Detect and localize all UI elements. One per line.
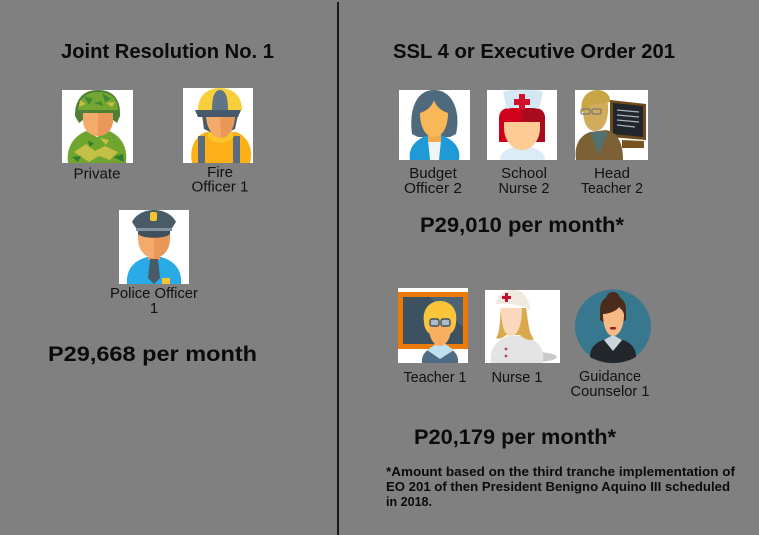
label: School Nurse 2 — [498, 165, 550, 197]
icon: police officer — [119, 210, 189, 284]
icon: head teacher — [575, 90, 648, 160]
label: School Nurse 2: Nurse 2 — [498, 180, 550, 197]
icon: teacher — [398, 288, 468, 363]
icon: school nurse — [487, 90, 557, 160]
salary: P29,668: P29,668 per month — [48, 343, 257, 366]
label: Head Teacher 2: Teacher 2 — [581, 180, 643, 197]
icon: soldier — [62, 90, 133, 163]
footnote: in 2018. — [386, 495, 432, 509]
icon: nurse — [485, 290, 560, 363]
label: Police Officer 1: 1 — [150, 300, 158, 317]
label: Private: Private — [74, 166, 120, 182]
label: Budget Officer 2 — [404, 165, 462, 197]
salary: P20,179: P20,179 per month* — [414, 426, 617, 449]
panel: SSL 4 or Executive Order 201 — [386, 41, 736, 509]
label: Budget Officer 2: Officer 2 — [404, 180, 462, 197]
label: Head Teacher 2: Head — [594, 165, 630, 182]
label: Guidance Counselor 1: Counselor 1 — [570, 383, 650, 400]
label: Nurse 1: Nurse 1 — [492, 369, 542, 386]
label: Police Officer 1: Police Officer — [110, 285, 198, 302]
icon: guidance counselor — [575, 290, 651, 364]
label: Fire Officer 1: Fire — [207, 164, 233, 181]
footnote: *Amount based on the third tranche implementation of — [386, 465, 736, 479]
panel: Joint Resolution No. 1 — [48, 41, 274, 366]
label: School Nurse 2: School — [501, 165, 547, 182]
footnote — [386, 465, 736, 509]
label: Fire Officer 1: Officer 1 — [192, 178, 248, 196]
label: Head Teacher 2 — [581, 165, 643, 197]
label: Teacher 1: Teacher 1 — [404, 369, 466, 386]
footnote: EO 201 of then President Benigno Aquino III scheduled — [386, 480, 730, 494]
icon: firefighter — [183, 88, 253, 163]
label: Police Officer 1 — [110, 285, 198, 317]
heading: SSL 4 or Executive Order 201: SSL 4 or Executive Order 201 — [393, 41, 675, 63]
label: Budget Officer 2: Budget — [409, 165, 458, 182]
salary: P29,010: P29,010 per month* — [420, 214, 625, 237]
label: Fire Officer 1 — [192, 164, 248, 196]
icon: budget officer — [399, 90, 470, 160]
label: Guidance Counselor 1 — [570, 368, 650, 400]
heading: Joint Resolution No. 1: Joint Resolution No. 1 — [61, 41, 274, 63]
label: Guidance Counselor 1: Guidance — [579, 368, 641, 385]
